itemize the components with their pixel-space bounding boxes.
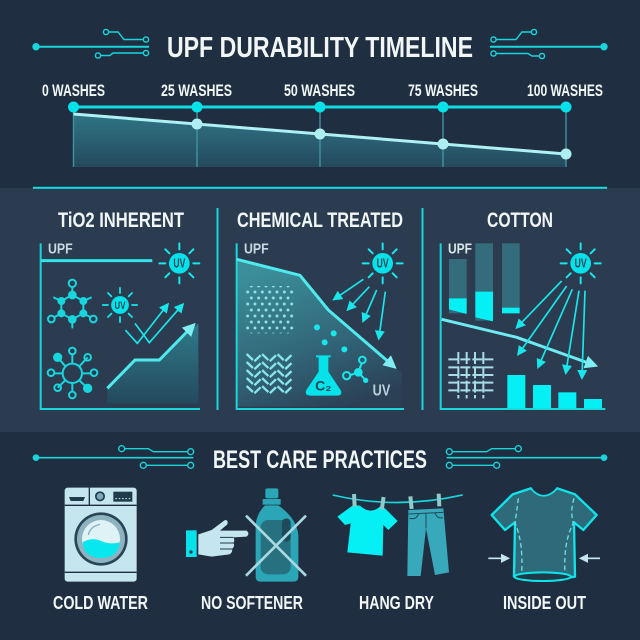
icon: pointing hand [186,520,248,557]
timeline labels: 25 WASHES [161,82,232,100]
label: no softener: NO SOFTENER [201,592,303,613]
icon: washing machine [65,488,137,582]
heading: best care practices: BEST CARE PRACTICES [213,446,427,474]
UPF label: UPF [448,241,472,257]
icon: UV sun [561,243,601,283]
icon: jeans [407,508,449,576]
panel: TiO2 inherent [41,241,200,409]
icon: round molecule [48,348,97,398]
falling area chart [237,259,402,407]
timeline labels: 100 WASHES [527,82,603,100]
axes [41,243,200,409]
section divider [33,187,607,189]
title: UPF DURABILITY TIMELINE [167,32,473,64]
arrow: left side [488,556,504,561]
icon: small molecule [343,357,367,382]
panel divider 1 [216,208,218,410]
care icons left [65,488,306,582]
icon: UV sun [363,243,403,283]
heading: TiO2 inherent: TiO2 INHERENT [58,209,184,232]
label: cold water: COLD WATER [53,592,148,613]
transmission bars [507,375,602,408]
icon: deflected UV arrows [125,305,182,343]
icon: flask: C₂ [315,378,331,394]
timeline labels: 50 WASHES [284,82,355,100]
UPF bars [449,243,520,321]
heading: chemical treated: CHEMICAL TREATED [237,209,403,232]
icon: woven fabric [448,352,493,398]
timeline labels [42,82,603,100]
icon: herringbone fabric [247,354,293,393]
falling UPF line [442,319,594,365]
axes [441,243,605,409]
icon: halftone dots [245,286,294,333]
icon: inside-out shirt [488,488,600,581]
circuit decoration: care right [446,446,607,468]
UV arrows [518,281,585,377]
circuit decoration: title right [490,29,607,59]
label: inside out: INSIDE OUT [503,592,587,613]
icon: UV sun: UV [575,257,587,271]
UV arrows [335,279,385,337]
panel: cotton [441,241,605,409]
icon: UV sun: UV [377,257,389,271]
care icons right [333,488,600,581]
icon: clothesline [333,494,463,576]
circuit decoration: care left [33,446,194,468]
UV label: UV [373,383,391,400]
heading: cotton: COTTON [487,209,553,232]
timeline labels: 75 WASHES [408,82,478,100]
clothes pins [352,494,441,510]
icon: softener bottle crossed out [246,488,306,582]
UPF flat line [41,256,152,265]
timeline labels: 0 WASHES [42,82,105,100]
circuit decoration: title left [33,29,149,58]
icon: UV sun small: UV [115,300,126,312]
icon: UV sun small [103,288,137,322]
arrow: right side [585,556,600,561]
label: hang dry: HANG DRY [359,592,435,613]
icon: hexagon molecule [48,280,97,328]
rising area chart [107,323,198,403]
panel divider 2 [422,208,424,410]
axes [237,243,404,409]
falling UPF line [237,259,393,366]
UPF label: UPF [244,241,269,257]
chemical droplets [314,324,347,352]
panel: chemical treated [237,241,404,409]
icon: flask [306,355,341,396]
rising UPF line [107,326,193,388]
icon: t-shirt cyan [337,505,398,556]
UPF label: UPF [48,241,73,257]
icon: UV sun large [159,243,199,283]
timeline chart [68,102,572,167]
comparison band background [0,188,640,432]
icon: UV sun large: UV [173,257,186,271]
